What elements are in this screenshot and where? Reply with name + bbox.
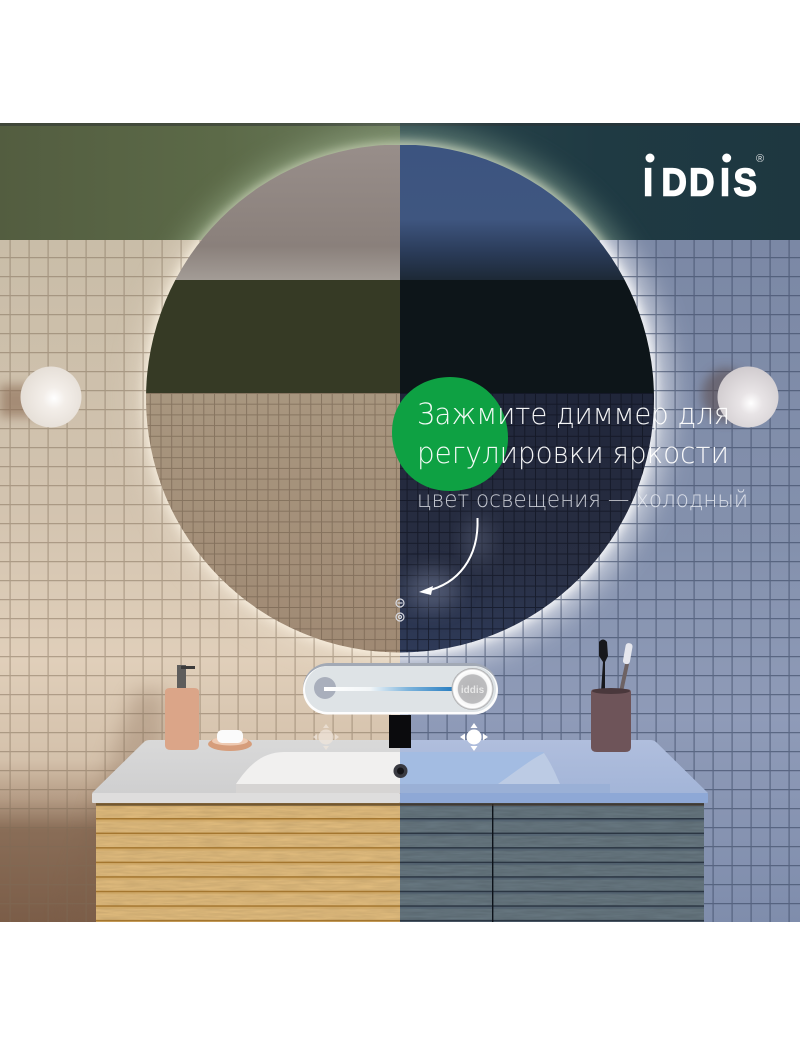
vanity cabinet warm half bbox=[96, 803, 400, 922]
counter shadow on cabinet bbox=[96, 803, 704, 806]
countertop warm half bbox=[92, 740, 400, 803]
vanity cabinet cool half bbox=[400, 803, 704, 922]
headline: Зажмите диммер для bbox=[417, 397, 730, 431]
soap dish bbox=[208, 730, 252, 751]
brand logo: IDDIS bbox=[643, 160, 757, 204]
headline bbox=[417, 397, 730, 470]
soap dispenser bbox=[165, 665, 199, 750]
drain bbox=[394, 764, 408, 778]
mirror touch icons bbox=[396, 599, 404, 621]
toothbrush cup bbox=[591, 640, 633, 752]
faucet bbox=[389, 715, 411, 748]
tiled wall warm side bbox=[0, 240, 400, 922]
subheading: цвет освещения — холодный bbox=[417, 487, 748, 513]
wall lamp right bbox=[702, 366, 778, 428]
countertop cool half bbox=[400, 740, 708, 803]
brightness slider bbox=[303, 663, 498, 714]
sun icon bright bbox=[460, 723, 488, 751]
upper painted wall bbox=[0, 123, 800, 240]
green accent circle bbox=[392, 377, 508, 491]
sun icon dim bbox=[313, 724, 339, 750]
tiled wall cool side bbox=[400, 240, 800, 922]
wall lamp left bbox=[0, 366, 82, 428]
arrow to dimmer bbox=[419, 518, 478, 595]
brightness slider: iddis bbox=[461, 685, 485, 696]
round mirror bbox=[146, 145, 654, 653]
headline: регулировки яркости bbox=[417, 436, 729, 470]
bathroom scene bbox=[0, 123, 800, 922]
brand logo: ® bbox=[756, 153, 764, 165]
